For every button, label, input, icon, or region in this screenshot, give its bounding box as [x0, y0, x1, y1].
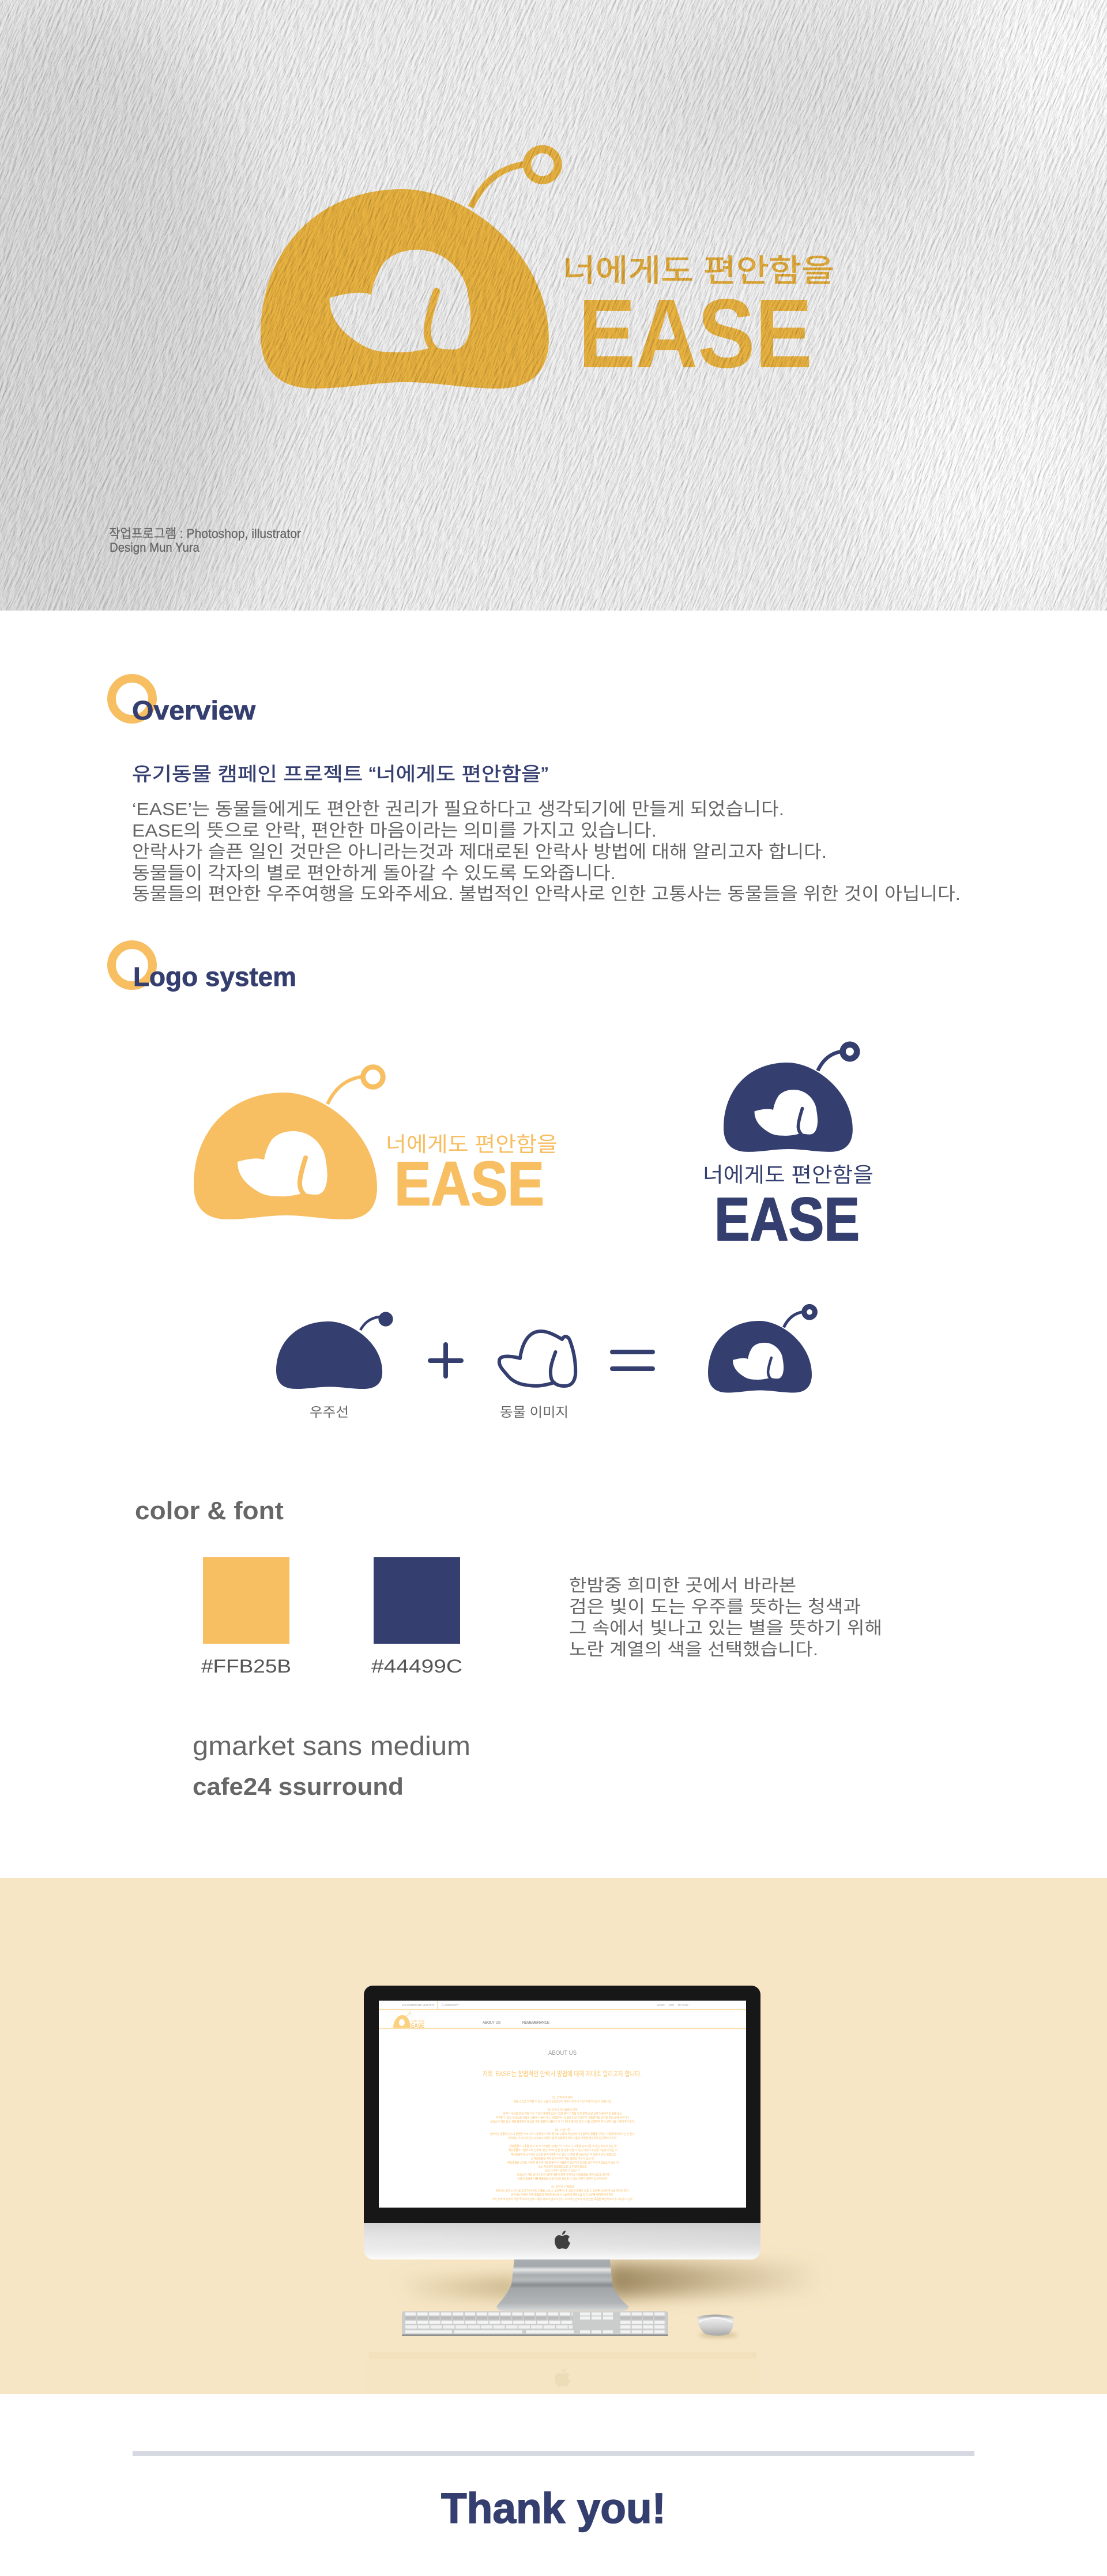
- website article text: 04. 안락사 시행방법: [551, 2185, 574, 2189]
- font sample: cafe24 ssurround: cafe24 ssurround: [193, 1773, 404, 1800]
- icon: equals sign: [612, 1352, 653, 1369]
- swatch: navy: #44499C: [371, 1656, 462, 1677]
- panel: hero embossed paper with gold logo: [0, 0, 1107, 611]
- keyboard: [402, 2311, 668, 2336]
- logo: yellow horizontal version: [194, 1067, 558, 1219]
- website article text: 안락사는 동물의 인도가 분명한 수의사가 시술하여야 하며 절대로 고통에 무관심하거나 함부로 동물을 다루는 사람에게 맡겨서는 안 된다.: [490, 2132, 635, 2136]
- hero credits text: [109, 526, 301, 555]
- yellow EASE wordmark: EASE: [394, 1148, 544, 1218]
- swatch: yellow: #FFB25B: [201, 1656, 291, 1677]
- website top bar: JOIN: [669, 2003, 674, 2006]
- icon: apple logo: [555, 2231, 570, 2249]
- website article text: 그 해당동물을 계속 살려두어야 하는 합당한 이유가 있는가?: [530, 2156, 594, 2160]
- hero credits text: Design Mun Yura: [110, 540, 200, 555]
- website article text: - 보호소의 재정 상태나 인력, 물적 자원의 한계 속에서도 해당동물을 계속 보살필 경우에: [515, 2172, 610, 2176]
- text block: overview description: 동물들의 편안한 우주여행을 도와주세요. 불법적인 안락사로 인한 고통사는 동물들을 위한 것이 아닙니다.: [132, 884, 961, 904]
- text block: overview description: [132, 799, 961, 904]
- panel: beige desktop mockup: [0, 1878, 1107, 2394]
- screen: website page: [379, 2001, 746, 2208]
- mouse: [698, 2314, 738, 2337]
- website article text: 회복할 수 없는 부상으로 극심한 고통에 시달리거나, 전염병이나 노령로 인한 건강악화, 행동장애로 인격한 위험 군에 속하거나: [496, 2116, 630, 2120]
- website headline: 저희 'EASE'는 합법적인 안락사 방법에 대해 제대로 알리고자 합니다.: [483, 2070, 642, 2078]
- website navigation: [483, 2021, 550, 2025]
- icon: yellow spaceship symbol: [194, 1067, 383, 1219]
- website article text: 03. 시행기준: [555, 2128, 570, 2132]
- hero paper texture: [0, 0, 1107, 611]
- heading: Overview: Overview: [132, 695, 255, 725]
- icon: plus sign: [430, 1345, 461, 1376]
- website article text: 01. 안락사의 정의: [552, 2095, 573, 2100]
- hero logo: gold symbol: [261, 149, 558, 389]
- label: animal image: 동물 이미지: [500, 1404, 568, 1419]
- website logo: EASE: [411, 2023, 424, 2029]
- hero credits text: 작업프로그램 : Photoshop, illustrator: [109, 526, 301, 541]
- monitor reflection: [364, 2352, 760, 2394]
- hero logo: gold EASE wordmark: EASE: [578, 279, 812, 389]
- website navigation: REMEMBRANCE: [522, 2021, 550, 2025]
- website article text: 동물 스스로 회복할 수 없는 고통과 공포로부터 해방시켜 주기 위한 최선의 인도적 동물사망.: [514, 2100, 612, 2103]
- text block: colour rationale: 그 속에서 빛나고 있는 별을 뜻하기 위해: [569, 1619, 882, 1638]
- website top bar: [402, 2001, 688, 2009]
- icon: combined navy symbol: [708, 1306, 815, 1393]
- monitor shadow on desk: [392, 2263, 824, 2298]
- text block: overview description: EASE의 뜻으로 안락, 편안한 마음이라는 의미를 가지고 있습니다.: [132, 820, 657, 841]
- heading: color and font: color & font: [135, 1497, 284, 1525]
- label: spaceship: 우주선: [310, 1404, 349, 1419]
- website article text: [490, 2095, 635, 2201]
- divider line: [133, 2451, 974, 2456]
- swatch: navy: [371, 1557, 462, 1677]
- website article text: 마취 상태 후 안락사 약을 투여하여 전혀 고통이 따르지 않아야 한다. 수의사는 안락사 후 완전한 죽음을 확인하여야 할 의무를 지닌다.: [492, 2197, 633, 2201]
- website article text: - 해당동물에게 요구되는 조건을 충족시켜줄 수는 없으나, 해당 종 (species) 의 보존과 같은 명분으로: [509, 2152, 616, 2156]
- logo: navy stacked version: [703, 1045, 873, 1253]
- website logo: 너에게도 편안함을: [411, 2020, 425, 2023]
- website article text: 보호소의 재정 또는 계편 환경변화 등으로 계류 동물의 고통지수가 지나치게 증가할 경우, 이를 선별하여 즉시 안락사를 시행하여야 한다.: [490, 2120, 635, 2124]
- text block: overview description: 안락사가 슬픈 일인 것만은 아니라는것과 제대로된 안락사 방법에 대해 알리고자 합니다.: [132, 842, 827, 862]
- yellow tagline: 너에게도 편안함을: [386, 1132, 558, 1156]
- navy EASE wordmark: EASE: [714, 1185, 860, 1253]
- website top bar: LOGIN: [657, 2003, 664, 2006]
- navy tagline: 너에게도 편안함을: [703, 1163, 873, 1187]
- swatch: yellow: [201, 1557, 291, 1677]
- font sample: gmarket sans medium: gmarket sans medium: [193, 1731, 470, 1761]
- text block: colour rationale: [569, 1576, 882, 1659]
- text block: colour rationale: 한밤중 희미한 곳에서 바라본: [569, 1576, 796, 1595]
- heading: Overview: [112, 678, 255, 725]
- monitor stand: [497, 2259, 628, 2311]
- icon: spaceship shape: [276, 1312, 393, 1389]
- website top bar: C/S CENTER 010-1234-5678: [402, 2003, 434, 2006]
- website article text: 또는 최소한의 보살핌만으로 그 위험의 정도를: [539, 2165, 587, 2169]
- monitor bezel: [364, 1986, 760, 2223]
- website top bar: MY PAGE: [678, 2003, 688, 2006]
- text block: overview description: ‘EASE’는 동물들에게도 편안한 권리가 필요하다고 생각되기에 만들게 되었습니다.: [132, 799, 784, 819]
- heading: Logo system: Logo system: [133, 962, 296, 992]
- website article text: 안락사는 수의사와 반드시 보호소 직원이 함께 시술해야 하며 다음의 사항을 명심하여 판단하여야 한다.: [508, 2136, 617, 2140]
- icon: animal outline: [499, 1331, 575, 1386]
- website navigation: ABOUT US: [483, 2021, 501, 2025]
- website article text: - 해당동물이 고통을 받고 있거나 비참한 상태인가? 그리고 그 고통을 감소시킬 수 없는 희망이 있는가?: [508, 2144, 617, 2148]
- heading: Logo system: [112, 944, 296, 992]
- monitor chin: [364, 2223, 760, 2259]
- website article text: - 해당동물이 기본적으로 신체적, 정신적으로 온전 한 삶을 누릴 수 있는 여건이 조성될 가능성이 있는가?: [507, 2148, 618, 2152]
- text block: campaign title: 유기동물 캠페인 프로젝트 “너에게도 편안함을”: [132, 763, 548, 785]
- website article text: 감소시키거나 방지할 수 있는가?: [545, 2169, 580, 2172]
- website article text: - 해당동물을 그대로 수용할 경우에 다른 동물이나 사람들의 건강이나 안전을 심각하게 위협요소가 있는가?: [506, 2161, 619, 2165]
- text block: overview description: 동물들이 각자의 별로 편안하게 돌아갈 수 있도록 도와줍니다.: [132, 863, 616, 883]
- closing message: Thank you!: [441, 2484, 666, 2532]
- website article text: 안락사는 반드시 의식을 잃게 하여 완전 고통을 느낄 수 없도록 한 후 심장과 호흡이 멈출 수 있도록 신속하게 시술 되어야 한다.: [496, 2189, 630, 2193]
- icon: navy spaceship symbol: [724, 1045, 857, 1152]
- website top bar: ☰ COMMUNITY: [442, 2003, 459, 2006]
- website page title: ABOUT US: [548, 2050, 577, 2057]
- website article text: 안락사 대상은 법정 계류 의무 기간이 종료되었으나 입양 등의 기회를 얻지 못해 공간 포화가 불가피한 동물 또는: [503, 2112, 622, 2116]
- hero logo: gold Korean tagline: 너에게도 편안함을: [563, 254, 834, 288]
- website article text: 02. 안락사 대상동물의 선정: [548, 2108, 578, 2112]
- text block: colour rationale: 노란 계열의 색을 선택했습니다.: [569, 1640, 818, 1659]
- website article text: 안락사는 주위의 다른 동물들과 격리된 장소에서 시술하여 공포심을 갖지 않도록 배려하여야 한다.: [511, 2193, 614, 2197]
- text block: colour rationale: 검은 빛이 도는 우주를 뜻하는 청색과: [569, 1598, 861, 1617]
- website article text: 도움이 필요한 다른 동물들을 인도적으로 보살필 수 있는 여력이 현격히 감소되는가?: [518, 2176, 608, 2180]
- website logo: [393, 2012, 425, 2029]
